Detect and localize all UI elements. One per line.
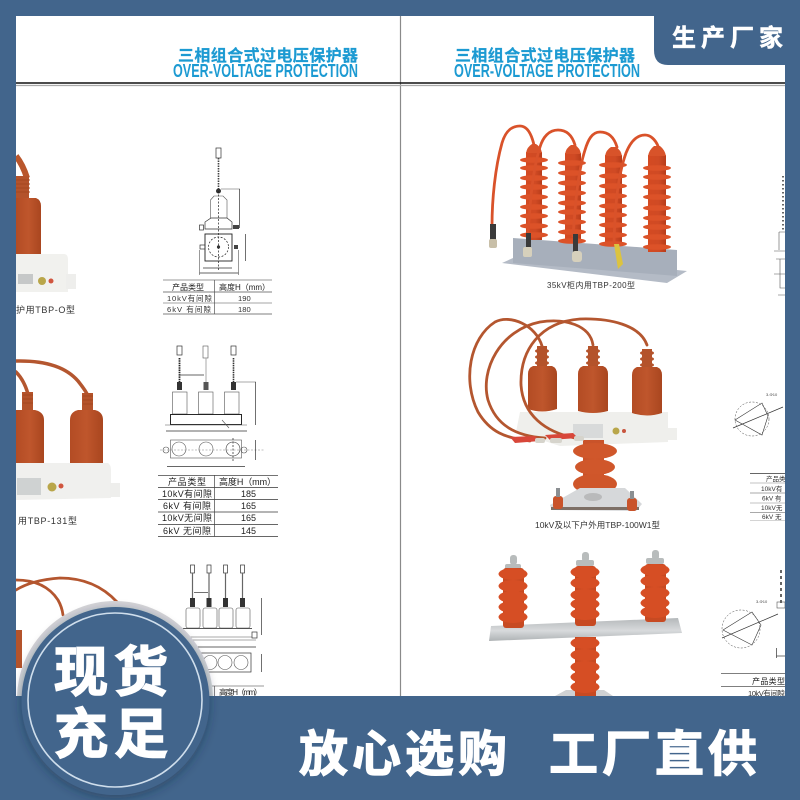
size table: right bottom partial: 10kV有间隙 [748,688,785,698]
size table: TBP-131 [158,475,278,536]
size table: TBP-O: 高度H（mm） [219,282,270,292]
column: second [558,145,586,244]
bellows [535,346,654,368]
size table: bottom left partial: 高度H（mm） [219,687,262,697]
wires [470,319,542,441]
product photo: three-column arrester on rail [489,550,682,696]
right page heading: 三相组合式过电压保护器 [455,46,635,65]
column: first [520,144,548,240]
badge: in stock [17,601,213,797]
size table: TBP-131: 10kV无间隙 [162,512,212,523]
catalogue page divider [400,16,402,696]
lower insulator [573,440,617,494]
size table: TBP-131: 产品类型 [168,476,206,487]
triangular plan drawing: right middle partial [733,392,783,436]
mounting plate [550,488,642,511]
size table: right middle partial: 6kV 无 [762,513,782,521]
size table: TBP-131: 6kV 有间隙 [163,500,211,511]
size table: TBP-O: 190 [238,294,251,303]
caption: TBP-200: 35kV柜内用TBP-200型 [547,280,635,290]
product photo: bottom left partial [16,578,117,668]
size table: TBP-131: 6kV 无间隙 [163,525,211,536]
product photo: TBP-200 four-column arrester [489,126,687,283]
dimension drawing: right top partial [774,176,785,295]
right page heading [454,46,640,81]
metal caps [505,550,664,570]
dimension drawing: bottom left [183,565,262,672]
size table: right middle partial: 10kV有 [761,484,783,493]
caption: TBP-O: 护用TBP-O型 [16,304,75,315]
size table: right middle partial: 6kV 有 [762,494,782,502]
dimension drawing: right bottom partial: 3-Φ10 [756,599,768,604]
size table: TBP-O: 180 [238,305,251,314]
right column [640,564,670,622]
dimension drawing: right bottom partial [722,570,785,658]
size table: TBP-O: 6kV 有间隙 [167,304,211,314]
product photo: TBP-O [16,156,76,292]
size table: TBP-131: 高度H（mm） [219,476,276,487]
size table: bottom left partial [205,686,264,697]
column: fourth [643,146,671,252]
size table: TBP-O [163,280,272,314]
rail [489,618,682,641]
terminals [490,224,496,240]
product photo: TBP-131 [16,361,120,500]
size table: right middle partial [750,474,786,521]
bottom slogan: 工厂直供 [549,715,761,786]
lower column [570,637,600,696]
left page heading: OVER-VOLTAGE PROTECTION [173,61,358,81]
size table: right middle partial: 产品类 [766,474,786,483]
size table: TBP-131: 10kV有间隙 [162,488,212,499]
size table: right bottom partial: 产品类型 [752,676,785,686]
cylinders [528,366,557,412]
right page heading: OVER-VOLTAGE PROTECTION [454,61,640,81]
white housing [516,412,677,446]
mounting flange [502,258,687,283]
dimension drawing: TBP-O [200,148,246,275]
left page heading [173,46,358,81]
size table: TBP-131: 165 [241,501,256,511]
triangular plan drawing: right middle partial: 3-Φ10 [766,392,778,397]
size table: TBP-O: 10kV有间隙 [167,293,212,303]
centre column [570,566,600,626]
product photo: TBP-100W1 [470,319,677,511]
tab: manufacturer: 生产厂家 [672,18,788,53]
left page heading: 三相组合式过电压保护器 [178,46,358,65]
size table: TBP-131: 145 [241,526,256,536]
mounting box [513,238,677,276]
size table: TBP-131: 185 [241,489,256,499]
column: third [599,147,627,247]
caption: TBP-100W1: 10kV及以下户外用TBP-100W1型 [535,520,660,530]
size table: right middle partial: 10kV无 [761,504,783,512]
dimension drawing: TBP-131 [160,346,265,466]
size table: right bottom partial [721,674,785,698]
bottom slogan: 放心选购 [299,715,511,786]
size table: TBP-O: 产品类型 [172,282,204,292]
caption: TBP-131: 用TBP-131型 [18,516,77,526]
lugs [510,436,540,443]
bottom slogan [299,715,761,786]
badge: in stock: 现货 [54,628,174,707]
left column [498,568,528,628]
base foot [555,690,613,696]
tab: manufacturer [654,0,800,65]
size table: TBP-131: 165 [241,513,256,523]
leads [492,126,534,226]
badge: in stock: 充足 [54,690,174,769]
